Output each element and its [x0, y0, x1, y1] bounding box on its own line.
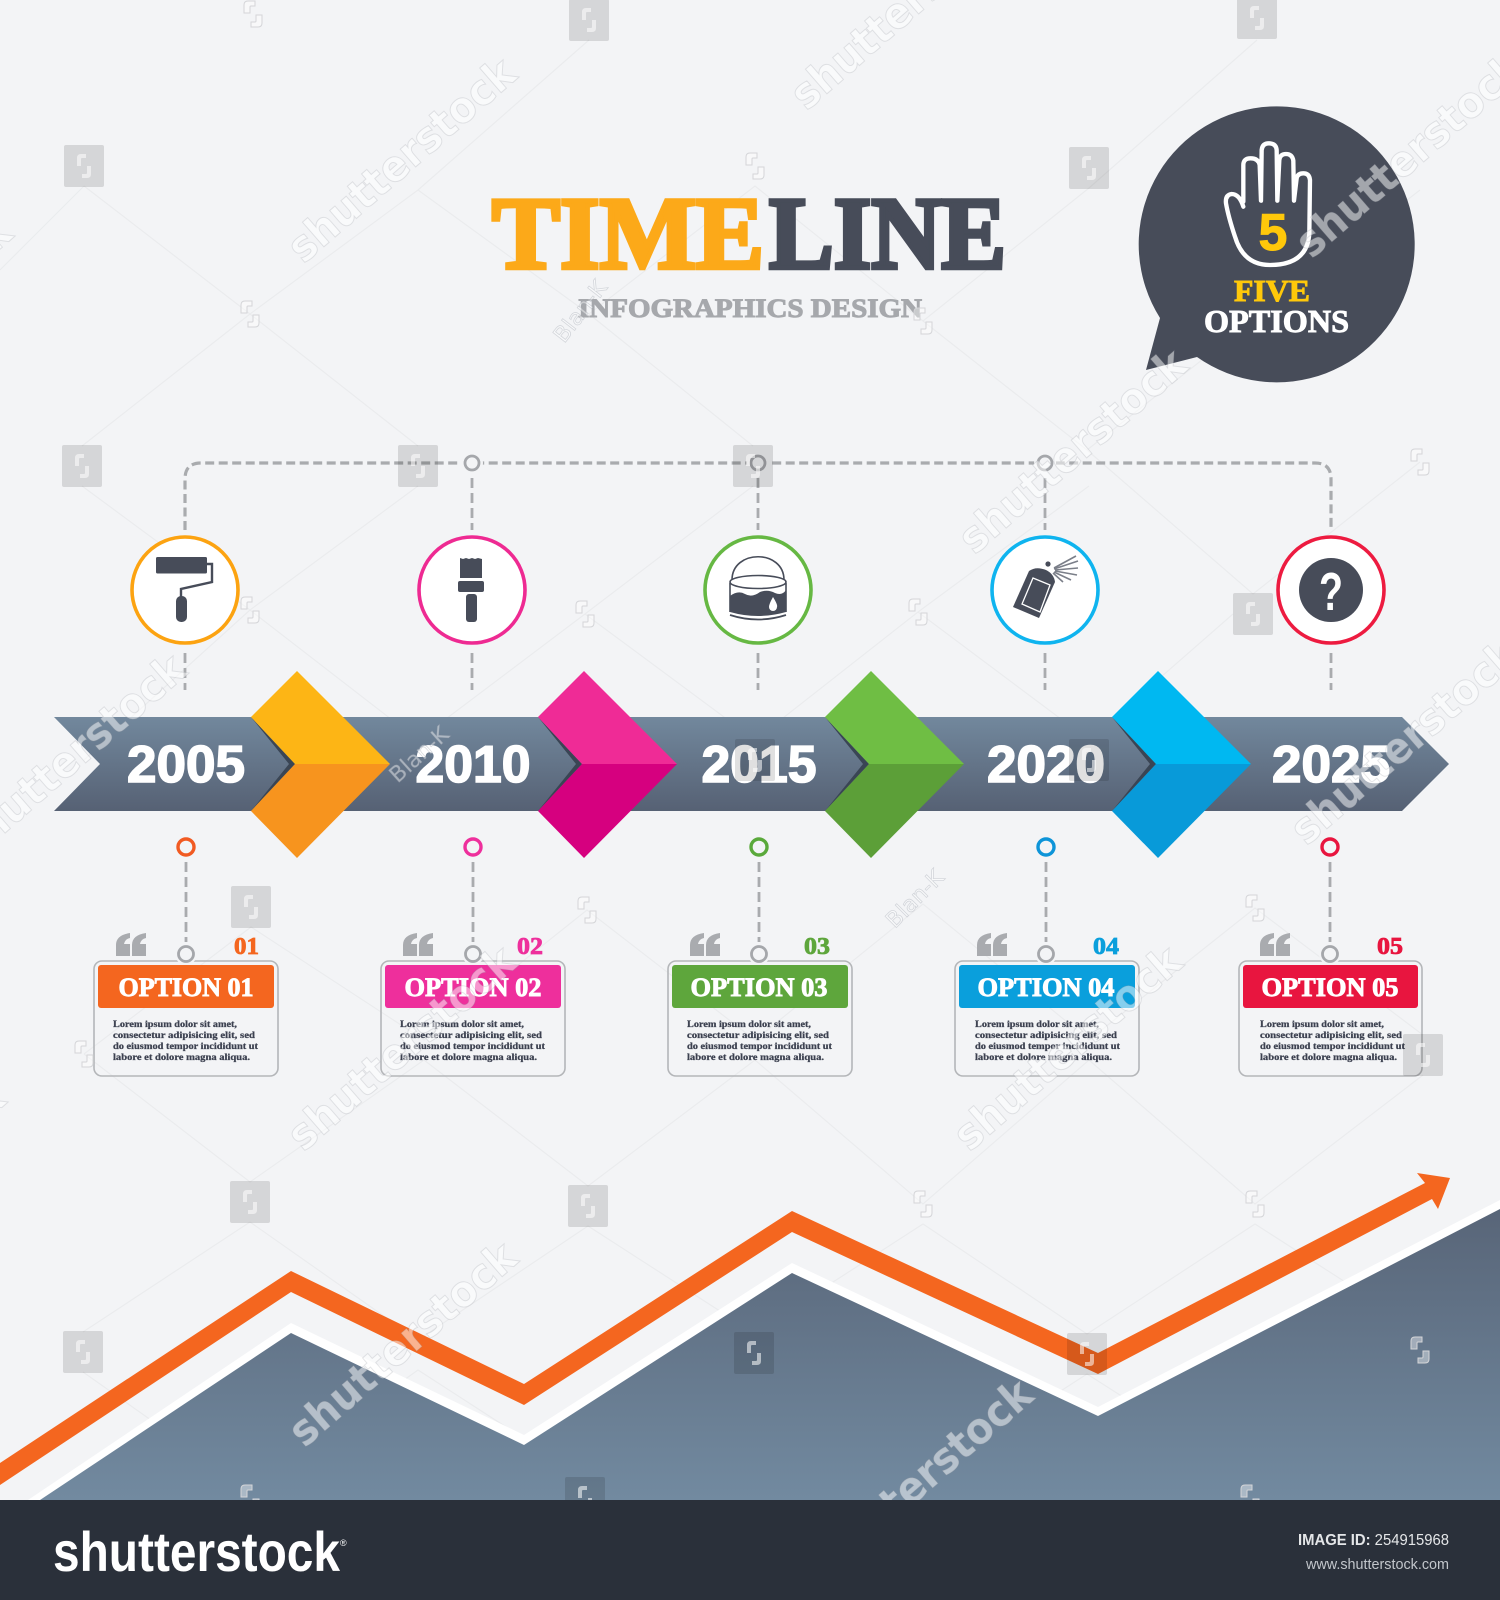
option card 1: 01	[234, 934, 259, 960]
dashed connector top	[185, 452, 1331, 690]
area chart with trend arrow	[0, 1173, 1500, 1500]
year labels: 2010	[416, 736, 530, 794]
timeline arrow bar	[54, 717, 1449, 811]
option card 4: Lorem ipsum dolor sit amet,	[975, 1020, 1099, 1030]
label: five: FIVE	[1234, 273, 1310, 308]
speech bubble: five options	[1139, 106, 1415, 382]
option card 3: Lorem ipsum dolor sit amet,	[687, 1020, 811, 1030]
option card 2: do eiusmod tempor incididunt ut	[400, 1042, 546, 1052]
watermarks: Blan-K	[385, 722, 455, 788]
chart area	[40, 1209, 1500, 1500]
chevron 2	[538, 671, 677, 858]
option card 3: do eiusmod tempor incididunt ut	[687, 1042, 833, 1052]
option card 1: OPTION 01	[118, 973, 254, 1002]
year labels: 2025	[1272, 736, 1390, 794]
year labels: 2015	[702, 736, 816, 794]
option card 2: consectetur adipisicing elit, sed	[400, 1031, 543, 1041]
title: LINE	[769, 177, 1006, 291]
option card 2: 02	[517, 934, 543, 960]
option card 1: Lorem ipsum dolor sit amet,	[113, 1020, 237, 1030]
footer bar	[0, 1500, 1500, 1600]
option card 5	[1239, 839, 1422, 1076]
option card 3: 03	[804, 934, 830, 960]
option card 4: 04	[1093, 934, 1119, 960]
image id: IMAGE ID: 254915968	[1298, 1532, 1449, 1549]
option card 3: consectetur adipisicing elit, sed	[687, 1031, 830, 1041]
registered mark: ®	[340, 1538, 347, 1548]
chevron 4	[1112, 671, 1251, 858]
watermarks: shutterstock	[795, 1368, 1044, 1594]
option card 5: consectetur adipisicing elit, sed	[1260, 1031, 1403, 1041]
number five: 5	[1259, 204, 1287, 262]
chevron 3	[825, 671, 964, 858]
option card 4	[955, 839, 1139, 1076]
icon circle: question mark: ?	[1319, 562, 1343, 622]
year labels	[127, 736, 1390, 794]
option card 2: OPTION 02	[404, 973, 542, 1002]
connector nodes	[461, 452, 1056, 474]
chevron 1	[251, 671, 390, 858]
option card 2: labore et dolore magna aliqua.	[400, 1053, 537, 1063]
watermarks: Blan-K	[549, 276, 613, 348]
icon circle: question mark	[1278, 537, 1384, 643]
watermarks: shutterstock	[279, 1231, 528, 1457]
option card 4: consectetur adipisicing elit, sed	[975, 1031, 1118, 1041]
option card 1	[94, 839, 278, 1076]
watermarks: shutterstock	[949, 338, 1198, 564]
year labels: 2005	[127, 736, 245, 794]
title: TIME	[492, 177, 764, 291]
option card 4: OPTION 04	[978, 973, 1114, 1002]
icon circle: spray can	[992, 537, 1098, 643]
watermarks: shutterstock	[278, 47, 527, 273]
trend arrow	[0, 1173, 1450, 1485]
icon circle: paint roller	[132, 537, 238, 643]
option card 4: do eiusmod tempor incididunt ut	[975, 1042, 1121, 1052]
icon circle: paint bucket	[705, 537, 811, 643]
title	[492, 177, 1006, 291]
year labels: 2020	[987, 736, 1105, 794]
icon: hand	[1226, 143, 1310, 265]
option card 3	[668, 839, 852, 1076]
option card 2: Lorem ipsum dolor sit amet,	[400, 1020, 524, 1030]
option card 1: do eiusmod tempor incididunt ut	[113, 1042, 259, 1052]
option card 3: labore et dolore magna aliqua.	[687, 1053, 824, 1063]
label: options: OPTIONS	[1204, 303, 1349, 339]
subtitle: INFOGRAPHICS DESIGN	[578, 294, 922, 323]
option card 1: consectetur adipisicing elit, sed	[113, 1031, 256, 1041]
chart white outline	[28, 1200, 1500, 1500]
watermarks: shutterstock	[944, 935, 1193, 1161]
watermarks: shutterstock	[278, 935, 527, 1161]
option card 5: labore et dolore magna aliqua.	[1260, 1053, 1397, 1063]
option card 1: labore et dolore magna aliqua.	[113, 1053, 250, 1063]
option card 5: Lorem ipsum dolor sit amet,	[1260, 1020, 1384, 1030]
option card 4: labore et dolore magna aliqua.	[975, 1053, 1112, 1063]
footer logo: shutterstock	[53, 1520, 341, 1583]
option card 3: OPTION 03	[690, 973, 828, 1002]
option card 5: OPTION 05	[1262, 973, 1398, 1002]
option card 5: do eiusmod tempor incididunt ut	[1260, 1042, 1406, 1052]
option card 2	[381, 839, 565, 1076]
option card 5: 05	[1377, 934, 1403, 960]
website: www.shutterstock.com	[1305, 1556, 1449, 1573]
icon circle: paint brush	[419, 537, 525, 643]
watermarks: Blan-K	[881, 865, 950, 933]
